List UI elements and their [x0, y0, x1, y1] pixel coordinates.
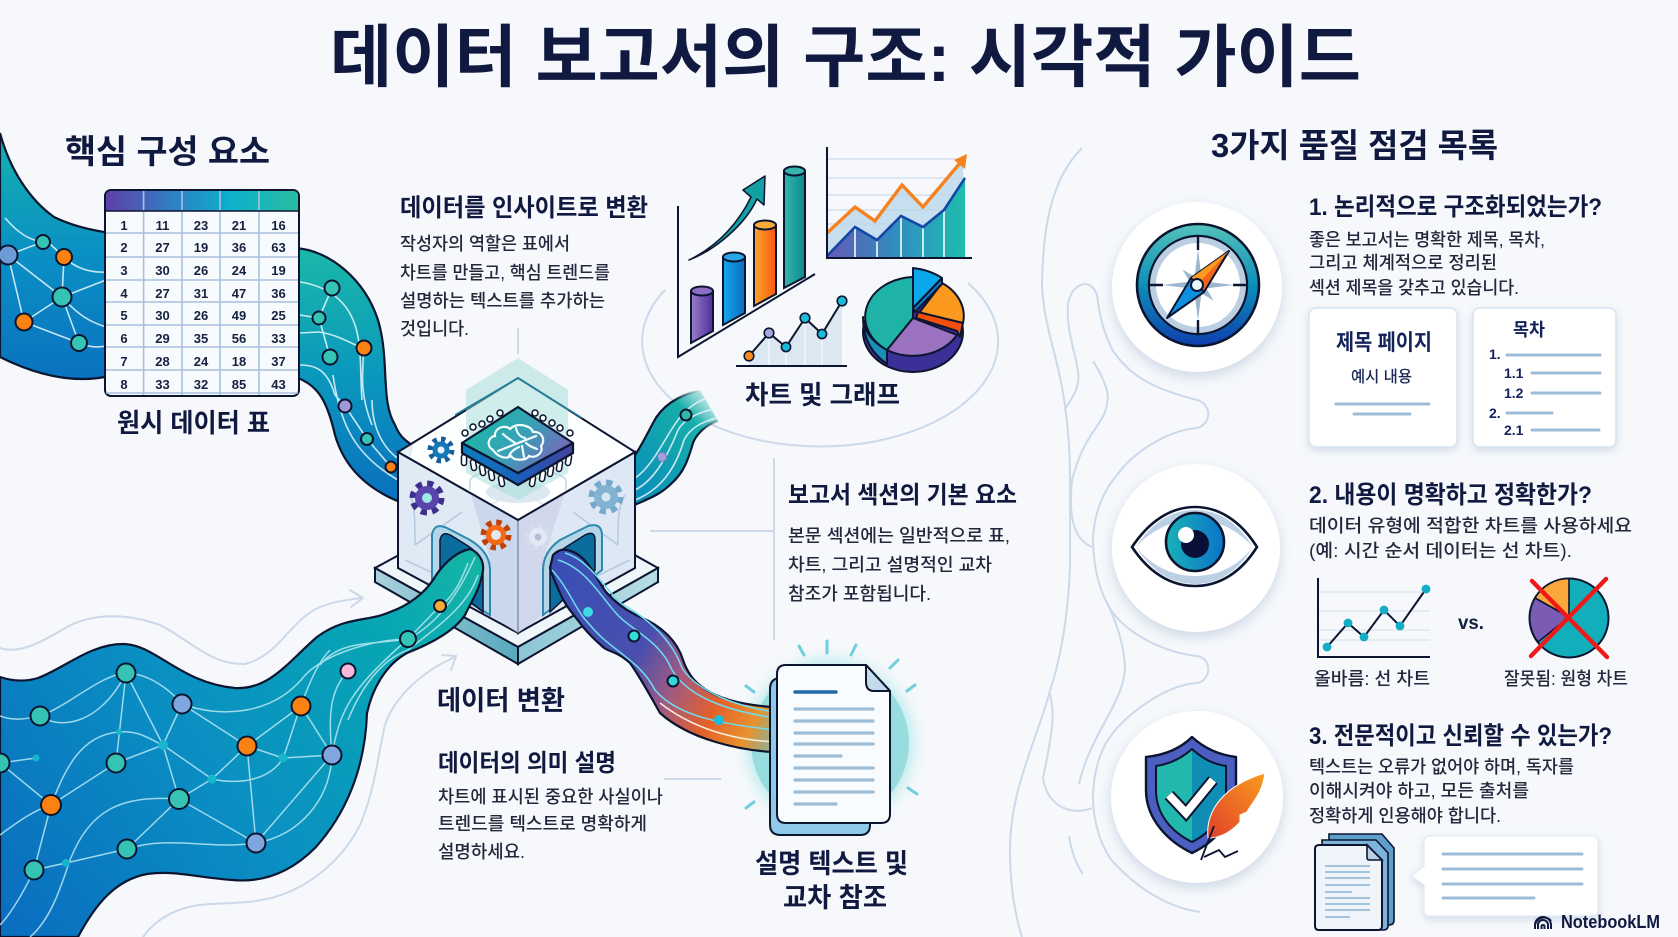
table values: 6	[120, 331, 128, 346]
table values: 26	[194, 263, 208, 278]
card: table of contents example: 1.1	[1504, 365, 1524, 381]
light rays	[746, 641, 917, 808]
card: table of contents example	[1473, 308, 1616, 447]
heading: core components: 핵심 구성 요소	[65, 133, 270, 170]
chart: 3D bar chart	[678, 166, 815, 357]
table values: 23	[194, 218, 208, 233]
text block: data to insight: 데이터를 인사이트로 변환	[400, 194, 648, 222]
text block: check 2: (예: 시간 순서 데이터는 선 차트).	[1309, 541, 1572, 561]
table values: 36	[271, 286, 286, 301]
table values: 3	[120, 263, 128, 278]
table values: 31	[194, 286, 208, 301]
text block: explain data meaning: 데이터의 의미 설명	[438, 750, 616, 777]
label: explanatory text and cross references: 교차 참조	[783, 883, 887, 913]
text block: explain data meaning: 설명하세요.	[438, 842, 525, 862]
ribbon: upper data stream right	[295, 248, 412, 502]
text block: report section basics: 본문 섹션에는 일반적으로 표,	[788, 526, 1010, 546]
ribbon: small stream to charts	[625, 390, 718, 507]
text block: explain data meaning: 트렌드를 텍스트로 명확하게	[438, 814, 647, 834]
table values: 11	[156, 218, 169, 233]
panel: isometric processing cube	[375, 358, 658, 664]
card: title page example: 예시 내용	[1351, 368, 1412, 386]
cube base plate	[375, 490, 658, 664]
chip pins	[464, 457, 569, 484]
table values: 27	[155, 240, 170, 255]
table values: 24	[232, 263, 247, 278]
card: table of contents example: 1.2	[1504, 385, 1524, 401]
table values: 25	[271, 308, 286, 323]
label: explanatory text and cross references	[755, 849, 908, 913]
card: title page example: 제목 페이지	[1336, 330, 1432, 355]
card: table of contents example: 2.1	[1504, 422, 1524, 438]
table values: 7	[120, 354, 128, 369]
icon: eye	[1112, 464, 1280, 632]
text block: check 3	[1309, 722, 1612, 826]
table values: 49	[232, 308, 246, 323]
ribbon: main data stream into cube	[0, 549, 483, 937]
table values: 30	[155, 308, 170, 323]
chart: area chart with trend arrow	[827, 147, 972, 258]
text block: check 2: 데이터 유형에 적합한 차트를 사용하세요	[1309, 516, 1632, 536]
table values: 5	[120, 308, 128, 323]
labels: chart comparison	[1314, 669, 1628, 689]
table values: 8	[120, 377, 128, 392]
label: explanatory text and cross references: 설명 텍스트 및	[755, 849, 908, 879]
chip contact loops	[462, 410, 573, 436]
panel: raw data table	[105, 190, 299, 396]
table values: 28	[155, 354, 170, 369]
logo: NotebookLM: NotebookLM	[1561, 911, 1660, 932]
title: 데이터 보고서의 구조: 시각적 가이드	[330, 20, 1361, 96]
table values: 37	[271, 354, 286, 369]
text block: check 1: 좋은 보고서는 명확한 제목, 목차,	[1309, 230, 1545, 250]
label: versus: vs.	[1458, 613, 1484, 634]
icon: report document	[746, 641, 917, 835]
text block: report section basics: 차트, 그리고 설명적인 교차	[788, 555, 992, 575]
text block: check 2	[1309, 481, 1632, 561]
table values: 19	[194, 240, 208, 255]
chart: incorrect pie chart with cross	[1530, 578, 1608, 658]
text block: check 3: 텍스트는 오류가 없어야 하며, 독자를	[1309, 757, 1574, 777]
table values: 21	[232, 218, 246, 233]
network nodes	[116, 664, 136, 682]
text block: data to insight: 것입니다.	[400, 319, 469, 339]
text block: data to insight: 차트를 만들고, 핵심 트렌드를	[400, 263, 610, 283]
label: data transformation: 데이터 변환	[437, 686, 565, 716]
table values: 35	[194, 331, 208, 346]
text block: check 1: 그리고 체계적으로 정리된	[1309, 253, 1497, 273]
card: table of contents example: 목차	[1513, 320, 1545, 340]
text block: check 1: 1. 논리적으로 구조화되었는가?	[1309, 193, 1602, 221]
background flow lines	[518, 148, 1208, 937]
ribbon: upper data stream left	[0, 133, 110, 379]
document glow	[746, 659, 914, 827]
arrow: lower flow arrow	[143, 655, 456, 937]
brain icon	[489, 425, 543, 460]
label: charts and graphs: 차트 및 그래프	[745, 380, 900, 410]
text block: check 1	[1309, 193, 1602, 298]
table values: 47	[232, 286, 246, 301]
text block: explain data meaning	[438, 750, 663, 862]
document lines	[795, 690, 836, 694]
table values: 33	[155, 377, 170, 392]
table values: 1	[120, 218, 128, 233]
text block: report section basics: 참조가 포함됩니다.	[788, 584, 931, 604]
table values: 36	[232, 240, 246, 255]
table values: 24	[194, 354, 209, 369]
card: table of contents example: 2.	[1489, 405, 1501, 421]
heading: quality checklist: 3가지 품질 점검 목록	[1211, 127, 1498, 164]
table values: 27	[155, 286, 170, 301]
table values: 43	[271, 377, 286, 392]
text block: data to insight	[400, 194, 648, 339]
text block: check 3: 이해시켜야 하고, 모든 출처를	[1309, 781, 1529, 801]
table values: 63	[271, 240, 286, 255]
text block: data to insight: 작성자의 역할은 표에서	[400, 234, 570, 254]
callout: citation speech bubble	[1411, 836, 1598, 916]
chart: correct line chart	[1318, 578, 1430, 657]
text block: report section basics	[788, 482, 1017, 604]
table values: 33	[271, 331, 286, 346]
table values: 16	[271, 218, 286, 233]
network links	[0, 557, 478, 937]
text block: check 2: 2. 내용이 명확하고 정확한가?	[1309, 481, 1592, 509]
table values: 26	[194, 308, 208, 323]
card: title page example	[1309, 308, 1457, 447]
icon: AI chip with brain	[462, 407, 573, 485]
glow hexagon above chip	[466, 358, 568, 500]
arrow: upper flow arrow	[0, 590, 363, 664]
text block: check 3: 3. 전문적이고 신뢰할 수 있는가?	[1309, 722, 1612, 750]
growth arrow	[689, 176, 765, 260]
text block: check 1: 섹션 제목을 갖추고 있습니다.	[1309, 278, 1519, 298]
table values: 29	[155, 331, 170, 346]
table values: 19	[271, 263, 286, 278]
card: table of contents example: 1.	[1489, 346, 1501, 362]
table values: 2	[120, 240, 128, 255]
table values: 4	[120, 286, 128, 301]
label: raw data table: 원시 데이터 표	[117, 408, 270, 438]
chart: 3D exploded pie chart	[863, 268, 964, 372]
text block: report section basics: 보고서 섹션의 기본 요소	[788, 482, 1017, 509]
table values: 18	[232, 354, 246, 369]
table values: 56	[232, 331, 246, 346]
icon: stacked source documents	[1315, 834, 1394, 930]
gears on cube	[413, 440, 620, 548]
arches	[432, 525, 602, 615]
table values: 85	[232, 377, 246, 392]
glass cube body	[398, 378, 635, 633]
labels: chart comparison: 잘못됨: 원형 차트	[1504, 669, 1628, 689]
icon: shield and quill	[1111, 711, 1283, 883]
table values: 30	[155, 263, 170, 278]
ribbon: purple to orange output stream	[550, 550, 775, 752]
text block: data to insight: 설명하는 텍스트를 추가하는	[400, 291, 605, 311]
chart: small line chart	[736, 296, 847, 366]
icon: compass	[1112, 202, 1282, 372]
text block: check 3: 정확하게 인용해야 합니다.	[1309, 806, 1501, 826]
labels: chart comparison: 올바름: 선 차트	[1314, 669, 1430, 689]
text block: explain data meaning: 차트에 표시된 중요한 사실이나	[438, 787, 663, 807]
table values: 32	[194, 377, 208, 392]
table values	[120, 218, 286, 392]
